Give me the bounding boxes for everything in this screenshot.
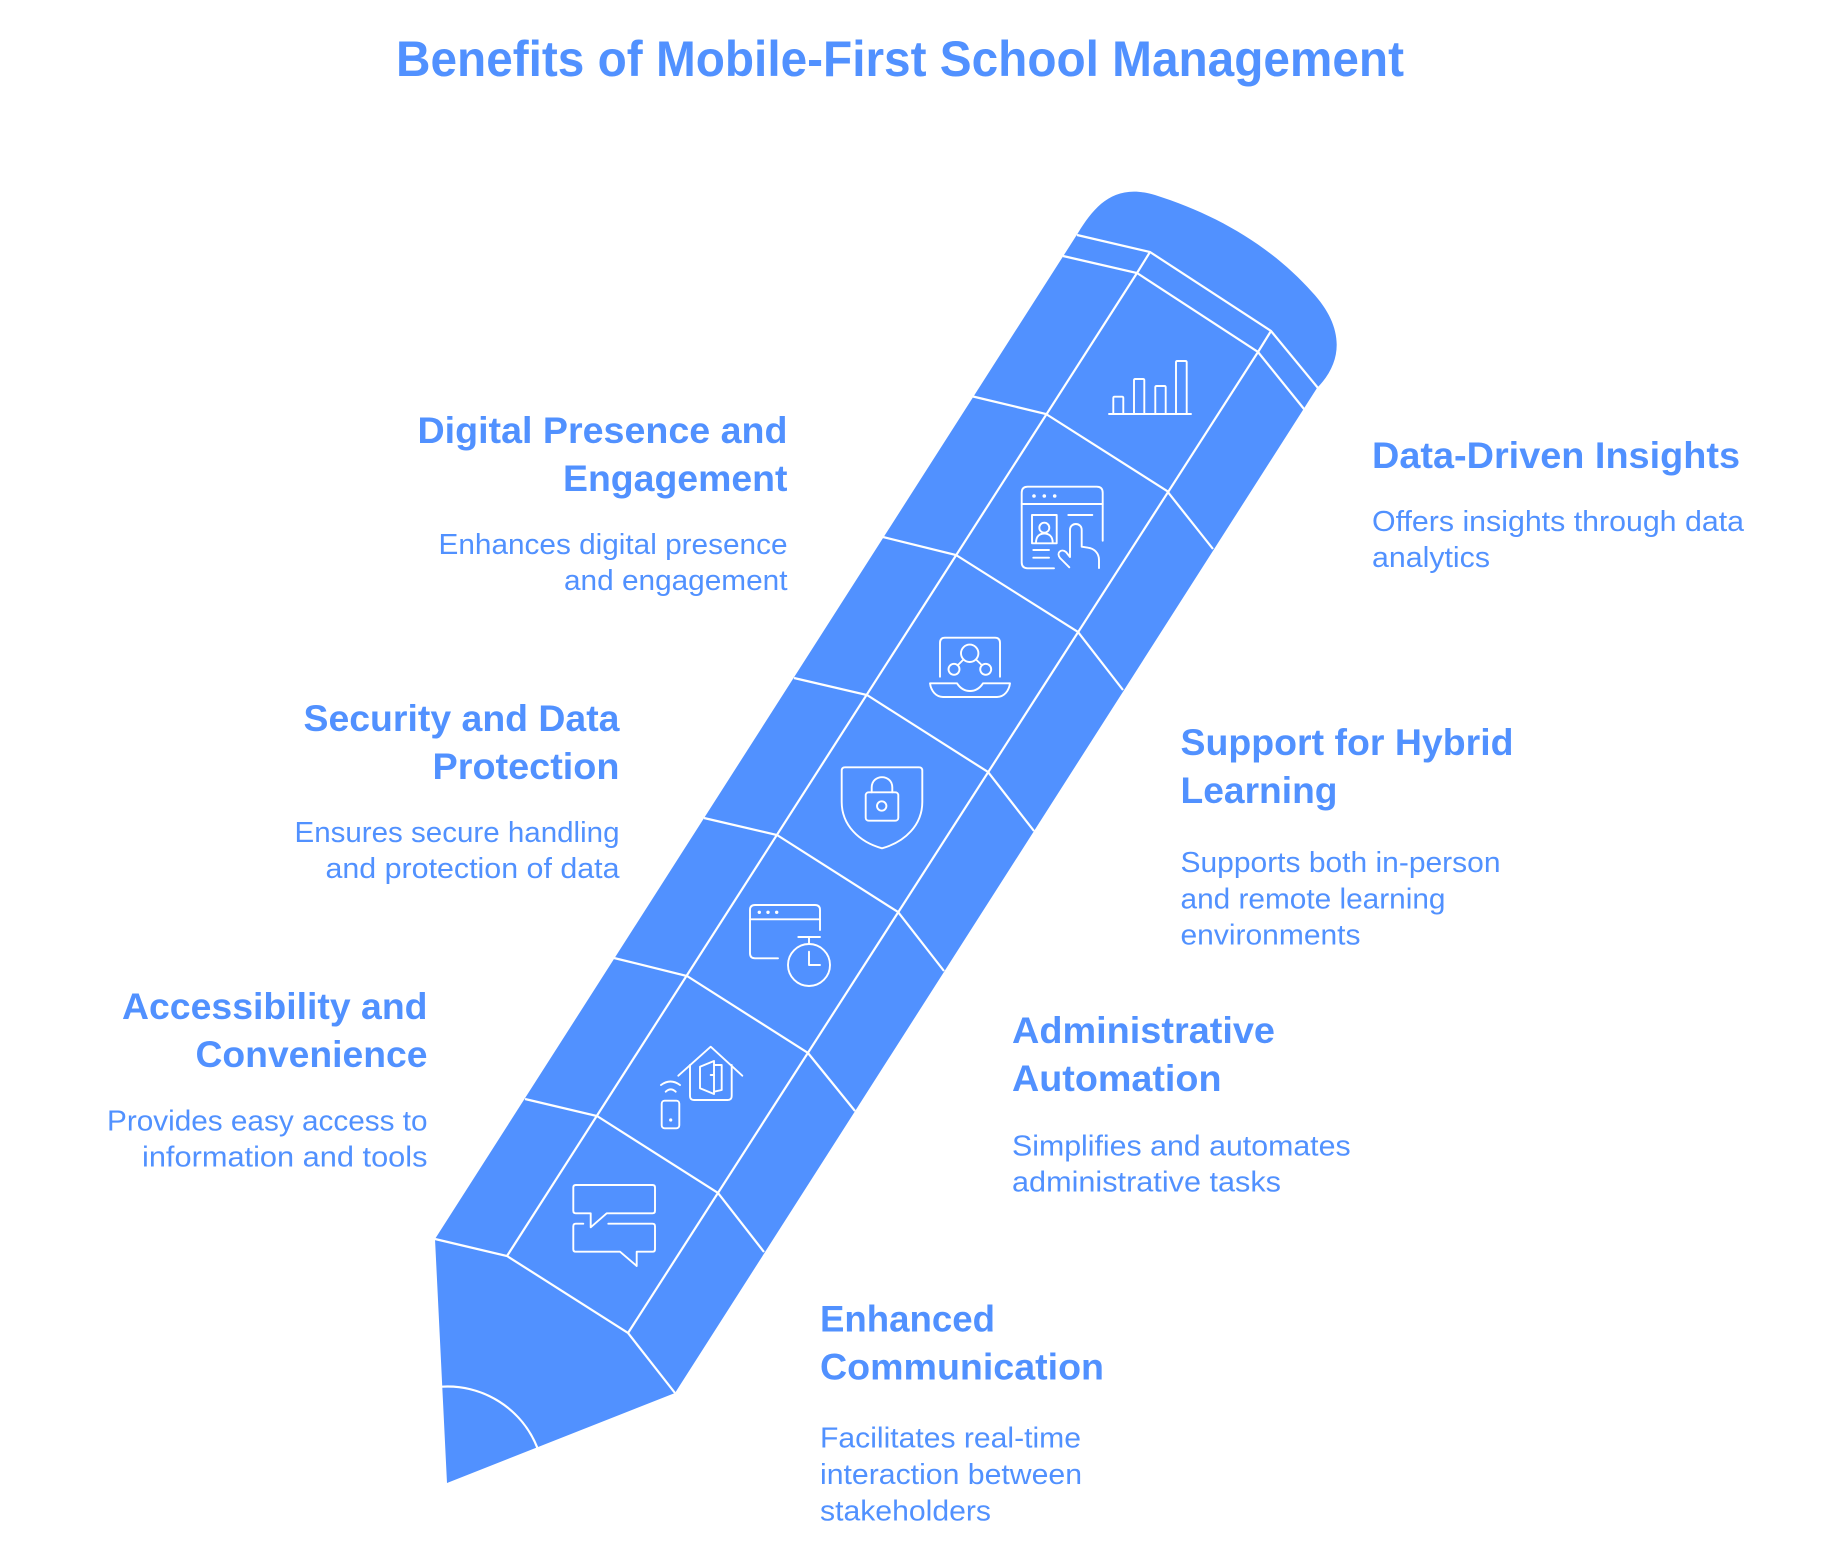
text block: Enhanced Communication: [820, 1298, 1104, 1528]
text block: Accessibility and Convenience: Provides easy access to: [107, 1106, 428, 1138]
text block: Security and Data Protection: Protection: [432, 745, 620, 787]
text block: Security and Data Protection: and protection of data: [326, 853, 620, 885]
text block: Digital Presence and Engagement: Enhances digital presence: [438, 529, 788, 561]
text block: Digital Presence and Engagement: [418, 409, 788, 597]
pencil body: [435, 192, 1337, 1483]
text block: Administrative Automation: Automation: [1012, 1057, 1222, 1099]
text block: Enhanced Communication: Enhanced: [820, 1298, 995, 1340]
text block: Accessibility and Convenience: Convenience: [196, 1033, 428, 1075]
pencil graphic: [435, 192, 1337, 1483]
text block: Data-Driven Insights: analytics: [1372, 542, 1490, 574]
text block: Data-Driven Insights: Offers insights through data: [1372, 506, 1745, 538]
text block: Support for Hybrid Learning: Supports both in-person: [1180, 847, 1500, 879]
text block: Administrative Automation: Simplifies and automates: [1012, 1130, 1351, 1162]
text block: Security and Data Protection: Security and Data: [304, 697, 621, 739]
icon: chat bubbles: [573, 1185, 655, 1266]
text block: Digital Presence and Engagement: and engagement: [564, 565, 788, 597]
text block: Support for Hybrid Learning: and remote learning: [1180, 884, 1446, 916]
text block: Administrative Automation: administrative tasks: [1012, 1166, 1281, 1198]
pencil segment lines: [435, 235, 1318, 1448]
text block: Accessibility and Convenience: [107, 985, 428, 1174]
text block: Digital Presence and Engagement: Digital Presence and: [418, 409, 788, 451]
text block: Data-Driven Insights: [1372, 434, 1745, 574]
text block: Administrative Automation: Administrative: [1012, 1009, 1275, 1051]
icon: laptop with connected users: [930, 638, 1010, 697]
title: Benefits of Mobile-First School Management: [396, 31, 1404, 87]
text block: Support for Hybrid Learning: [1180, 721, 1514, 952]
text block: Security and Data Protection: [294, 697, 621, 885]
text block: Accessibility and Convenience: information and tools: [142, 1142, 428, 1174]
text block: Enhanced Communication: interaction between: [820, 1459, 1082, 1491]
icon: web profile with pointing hand: [1022, 487, 1103, 568]
text block: Data-Driven Insights: Data-Driven Insights: [1372, 434, 1740, 476]
text block: Enhanced Communication: stakeholders: [820, 1496, 991, 1528]
text block: Accessibility and Convenience: Accessibility and: [122, 985, 428, 1027]
text block: Administrative Automation: [1012, 1009, 1351, 1198]
text block: Digital Presence and Engagement: Engagement: [563, 457, 788, 499]
text block: Security and Data Protection: Ensures secure handling: [294, 817, 620, 849]
text block: Enhanced Communication: Facilitates real-time: [820, 1423, 1081, 1455]
text block: Support for Hybrid Learning: environments: [1180, 920, 1360, 952]
icon: shield with padlock: [842, 767, 922, 848]
text block: Enhanced Communication: Communication: [820, 1346, 1104, 1388]
icon: browser window with stopwatch: [750, 905, 830, 986]
text block: Support for Hybrid Learning: Learning: [1180, 769, 1338, 811]
icon: bar chart: [1109, 361, 1191, 414]
icon: smart home with phone: [661, 1047, 742, 1128]
text block: Support for Hybrid Learning: Support for Hybrid: [1180, 721, 1514, 763]
